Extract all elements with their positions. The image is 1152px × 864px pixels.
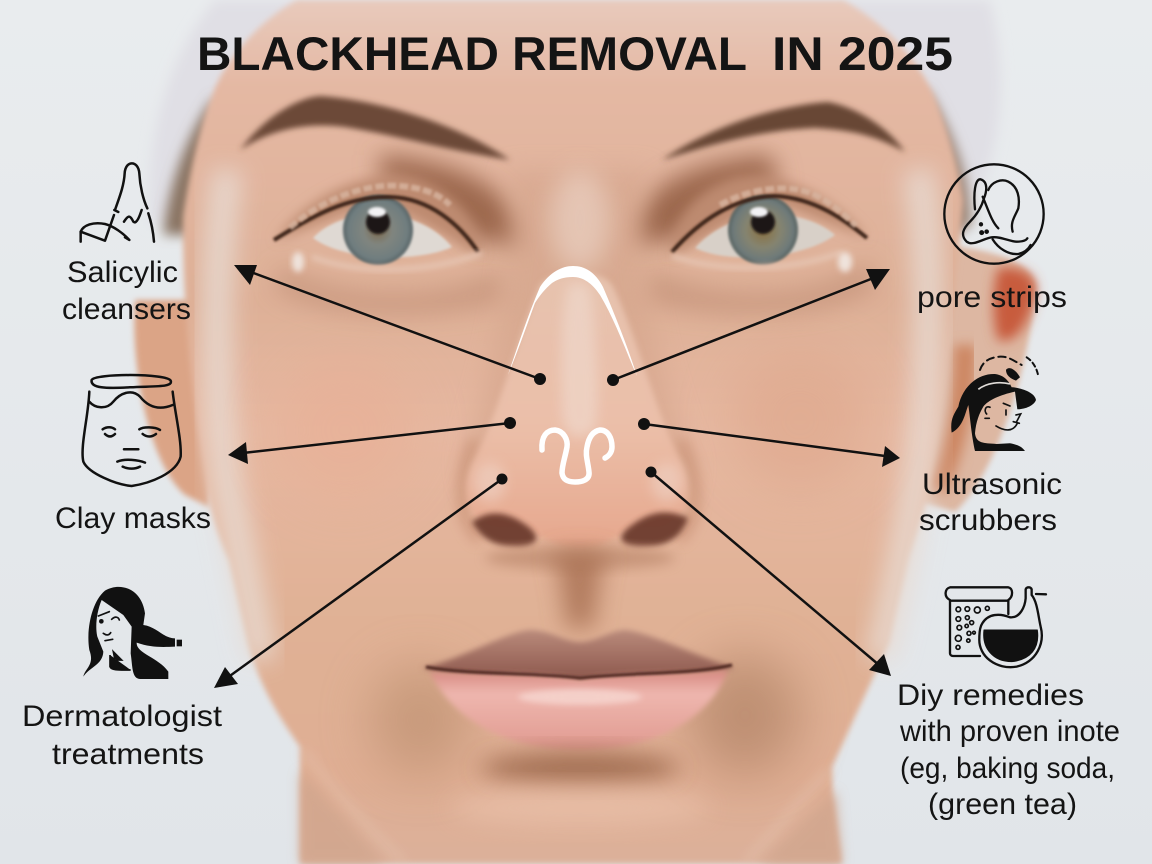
under eye shadow right xyxy=(645,260,875,314)
left nostril xyxy=(472,513,536,546)
icon: salicylic cleanser bottle xyxy=(81,163,154,242)
label: salicylic cleansers: cleansers xyxy=(62,293,191,326)
under lip shadow xyxy=(480,752,680,784)
arrow: clay masks xyxy=(228,417,516,464)
title: IN 2025 xyxy=(772,27,953,80)
jaw lines xyxy=(302,750,830,864)
nose wing crease xyxy=(462,440,696,540)
icon: DIY remedy jar and flask xyxy=(946,587,1046,667)
cheek warm right xyxy=(730,350,870,490)
pale strip right xyxy=(880,170,928,660)
right inner socket shadow xyxy=(634,155,780,248)
hair shadow left xyxy=(163,95,215,235)
left inner socket shadow xyxy=(380,155,522,250)
face skin xyxy=(183,0,963,864)
hair shadow right xyxy=(925,85,972,240)
arrow: DIY remedies xyxy=(646,466,891,676)
title: BLACKHEAD REMOVAL xyxy=(197,27,747,80)
mouth line xyxy=(426,665,732,678)
icon: ultrasonic scrubber head xyxy=(951,357,1038,451)
arrow: ultrasonic scrubbers xyxy=(638,418,900,467)
under nose shadow xyxy=(485,546,675,570)
nose white glyph xyxy=(542,430,612,482)
label: salicylic cleansers: Salicylic xyxy=(67,256,178,289)
right eye xyxy=(672,188,867,272)
left ear xyxy=(134,300,225,507)
label: DIY remedies: (eg, baking soda, xyxy=(900,752,1115,785)
right upper lid xyxy=(670,177,868,255)
label: ultrasonic scrubbers: Ultrasonic xyxy=(922,468,1062,501)
cheek warm left xyxy=(275,360,415,500)
right eyebrow xyxy=(662,102,905,160)
nose bridge shading xyxy=(466,170,692,520)
right wing highlight xyxy=(651,462,683,502)
label: dermatologist treatments: Dermatologist xyxy=(22,700,223,733)
mouth side shading left xyxy=(370,665,470,775)
face photograph xyxy=(134,0,1036,864)
label: DIY remedies xyxy=(897,679,1120,821)
chin highlight xyxy=(450,790,710,826)
left eye xyxy=(274,186,482,272)
arrow: pore strips xyxy=(607,269,890,386)
icon: dermatologist woman xyxy=(83,587,182,679)
nose highlight xyxy=(561,283,597,437)
mouth side shading right xyxy=(690,655,800,775)
philtrum shadow xyxy=(552,552,608,628)
upper lip xyxy=(422,630,735,680)
label: pore strips: pore strips xyxy=(917,281,1067,314)
lower lip xyxy=(430,670,728,750)
under eye shadow left xyxy=(275,265,505,314)
arrows xyxy=(214,265,900,688)
left upper lid xyxy=(276,177,482,255)
icon: pore strip nose in circle xyxy=(944,164,1044,264)
left wing highlight xyxy=(474,462,506,502)
lower lip gloss xyxy=(518,689,642,705)
label: dermatologist treatments xyxy=(22,700,223,771)
glabella highlight xyxy=(550,170,610,270)
label: salicylic cleansers xyxy=(62,256,191,326)
pale strip left xyxy=(217,170,262,660)
arrow: dermatologist treatments xyxy=(214,474,508,688)
label: DIY remedies: (green tea) xyxy=(928,788,1077,821)
label: clay masks: Clay masks xyxy=(55,502,211,535)
arrow: salicylic cleansers xyxy=(234,265,546,385)
label: DIY remedies: Diy remedies xyxy=(897,679,1084,712)
neck sides xyxy=(300,770,842,864)
left eyebrow xyxy=(240,96,510,160)
nose white bridge outline xyxy=(508,266,637,376)
label: ultrasonic scrubbers: scrubbers xyxy=(919,504,1057,537)
nose xyxy=(467,272,687,548)
label: dermatologist treatments: treatments xyxy=(52,738,204,771)
label: DIY remedies: with proven inote xyxy=(899,715,1120,748)
right ear xyxy=(915,245,1036,512)
label: ultrasonic scrubbers xyxy=(919,468,1062,537)
icon: clay mask xyxy=(83,375,181,486)
headband xyxy=(149,0,1001,225)
right nostril xyxy=(622,513,688,546)
